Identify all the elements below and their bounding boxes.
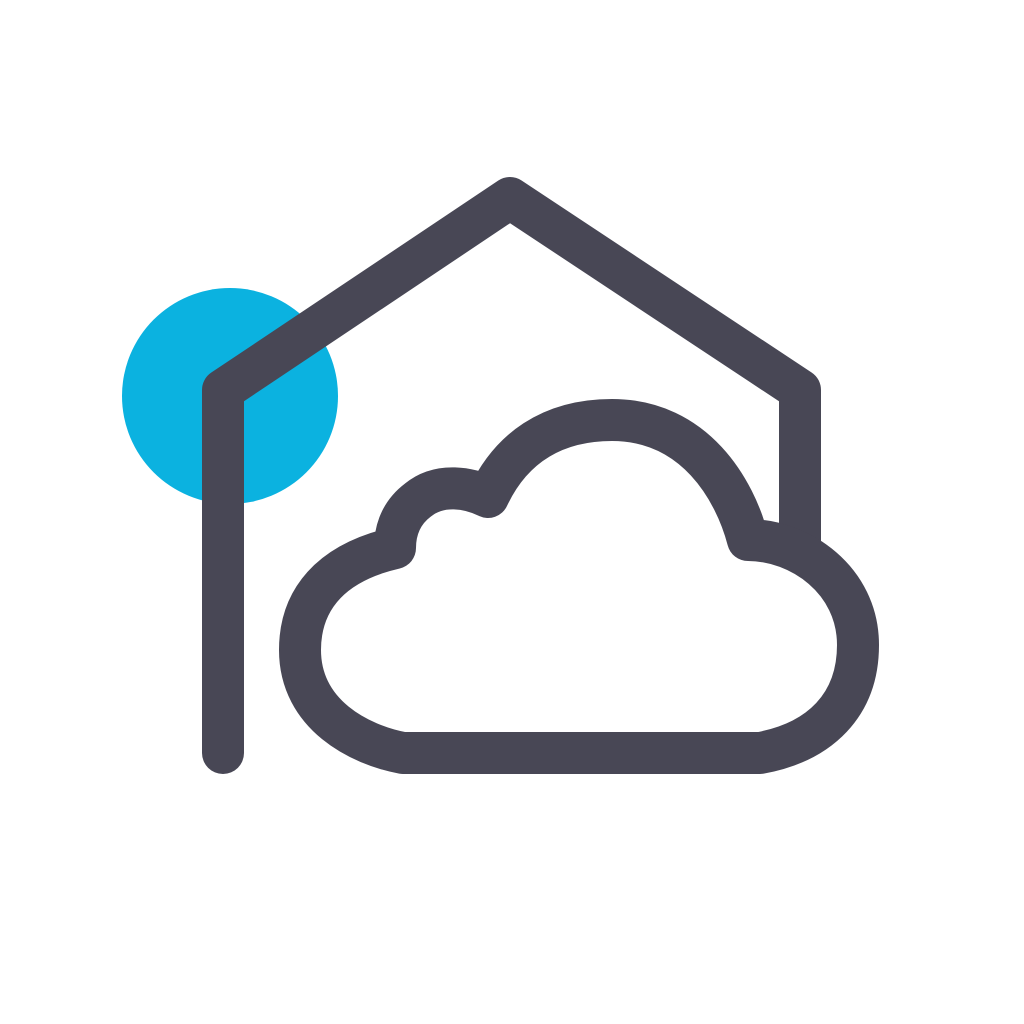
icon: house outline: [223, 198, 800, 753]
icon: cloud: [300, 420, 858, 753]
icon: blue circle: [122, 288, 338, 504]
